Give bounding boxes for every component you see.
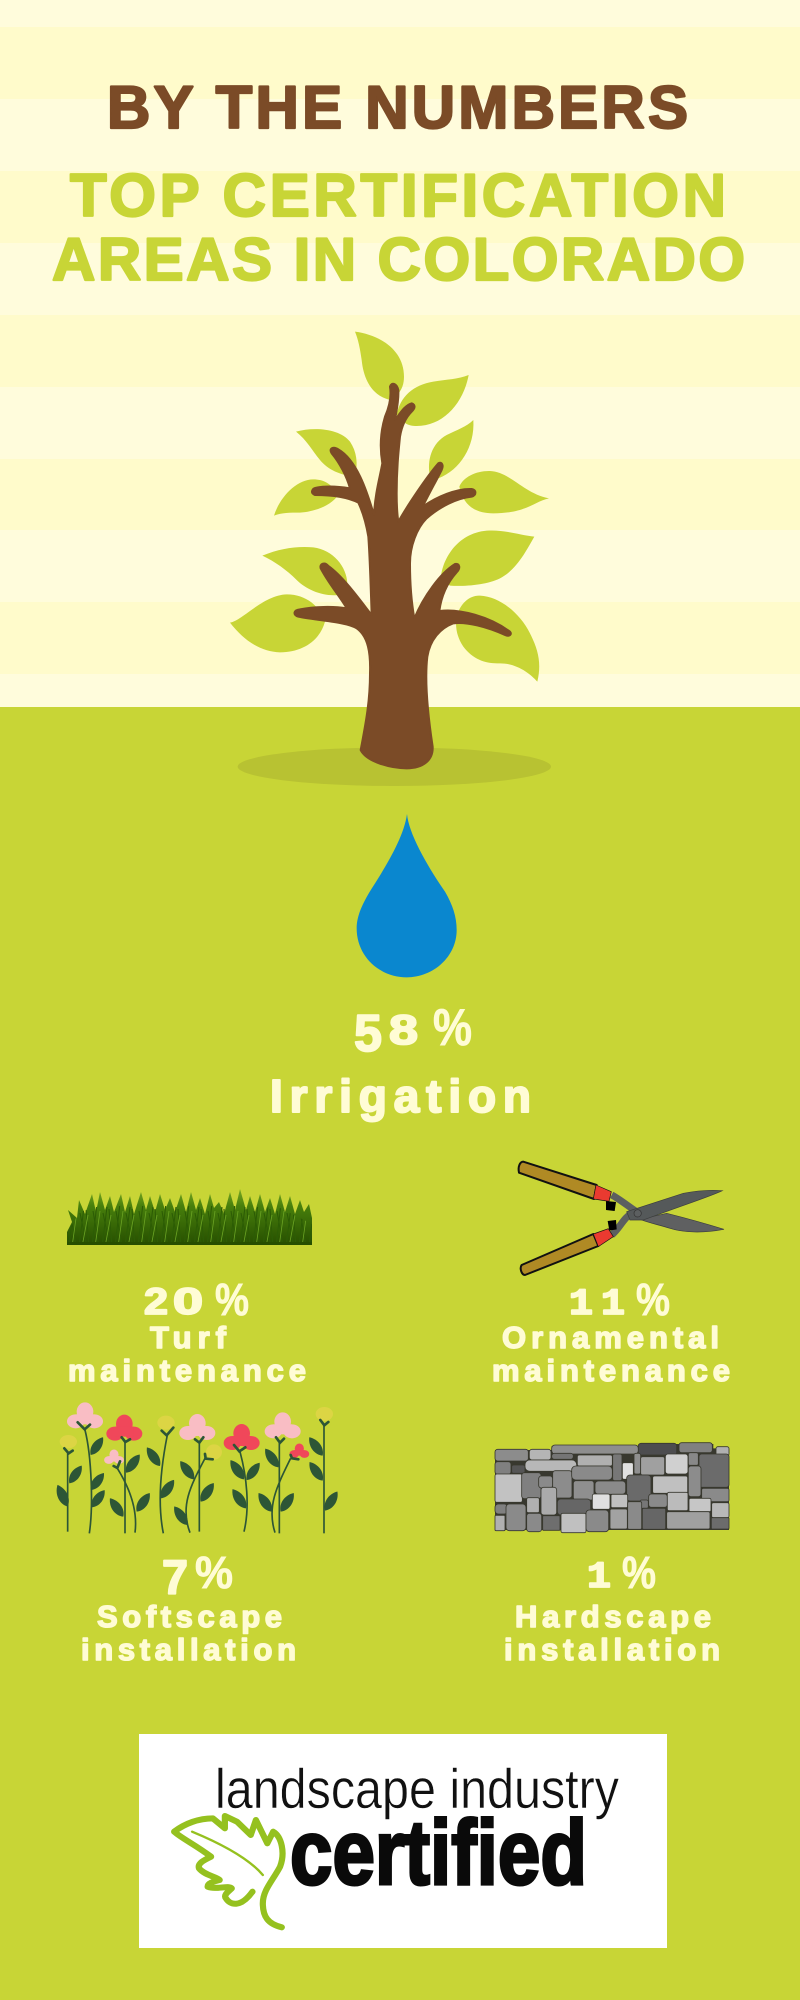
background: green ground xyxy=(0,707,800,2000)
label: Turf maintenance xyxy=(68,1320,306,1388)
subtitle: TOP CERTIFICATION xyxy=(70,162,726,229)
stat: 20%: % xyxy=(215,1274,249,1325)
label: Turf maintenance: Turf xyxy=(150,1320,227,1355)
label: Hardscape installation: Hardscape xyxy=(515,1599,711,1634)
stat: 7% xyxy=(162,1547,233,1605)
label: Softscape installation: Softscape xyxy=(97,1599,282,1634)
stat: 58%: 5 xyxy=(354,1005,382,1063)
background: striped sky xyxy=(0,0,800,710)
stat: 20%: 0 xyxy=(173,1281,203,1322)
stat: 7%: % xyxy=(195,1547,233,1598)
logo text: landscape industry: landscape industry xyxy=(215,1757,619,1820)
icon: grass xyxy=(67,1189,312,1245)
stat: 1%: % xyxy=(622,1547,656,1598)
stat: 58% xyxy=(354,999,472,1063)
label: Ornamental maintenance: maintenance xyxy=(492,1353,730,1388)
stat: 11% xyxy=(569,1274,670,1326)
label: Ornamental maintenance xyxy=(492,1320,730,1388)
stat: 58%: % xyxy=(433,999,472,1057)
label: Softscape installation xyxy=(81,1599,296,1667)
subtitle: AREAS IN COLORADO xyxy=(52,226,745,293)
logo panel: landscape industry certified xyxy=(139,1734,667,1948)
label: Turf maintenance: maintenance xyxy=(68,1353,306,1388)
label: Hardscape installation: installation xyxy=(504,1632,720,1667)
label: Ornamental maintenance: Ornamental xyxy=(502,1320,719,1355)
stat: 7%: 7 xyxy=(162,1552,188,1605)
stat: 11%: 1 xyxy=(601,1284,625,1326)
label: Hardscape installation xyxy=(504,1599,720,1667)
icon: stone wall xyxy=(495,1443,729,1533)
stat: 11%: 1 xyxy=(569,1284,593,1326)
label: Irrigation: Irrigation xyxy=(270,1070,531,1122)
label: Softscape installation: installation xyxy=(81,1632,296,1667)
icon: hedge shears xyxy=(519,1162,724,1275)
icon: flowers xyxy=(53,1402,341,1533)
stat: 20% xyxy=(144,1274,249,1325)
subtitle xyxy=(52,162,745,293)
stat: 1% xyxy=(587,1547,656,1599)
icon: tree xyxy=(230,332,551,786)
logo text: certified: certified xyxy=(290,1802,587,1904)
stat: 58%: 8 xyxy=(389,1006,418,1053)
stat: 1%: 1 xyxy=(587,1557,611,1599)
stat: 20%: 2 xyxy=(144,1281,168,1322)
icon: water drop xyxy=(357,814,457,977)
logo icon: leaf outline xyxy=(174,1816,283,1927)
title: BY THE NUMBERS xyxy=(107,74,688,141)
stat: 11%: % xyxy=(636,1274,670,1325)
